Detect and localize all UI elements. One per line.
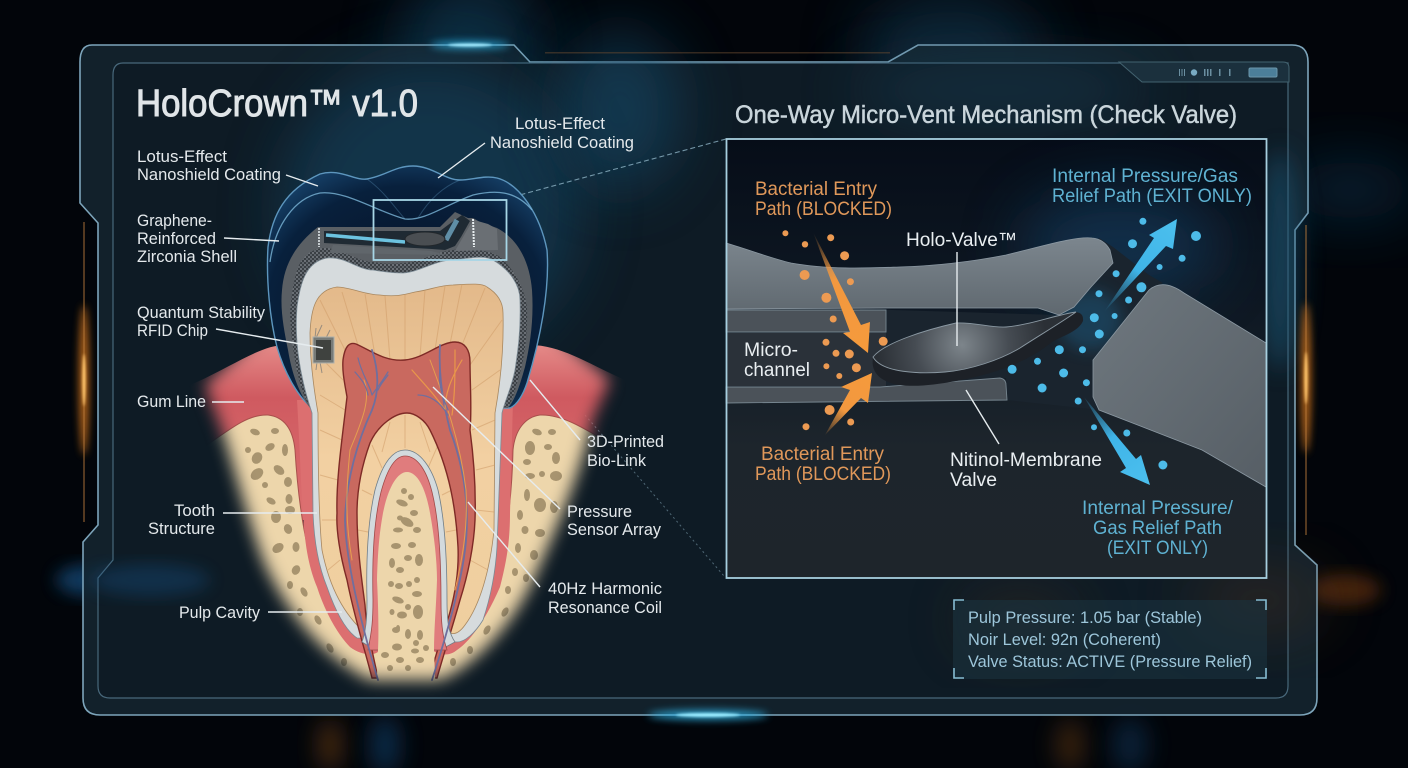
label: bio-link: 3D-Printed bbox=[587, 432, 664, 451]
blue particles bbox=[1008, 218, 1201, 470]
label: nitinol membrane bbox=[950, 390, 1102, 491]
dentin bbox=[310, 284, 503, 634]
label: zirconia shell: Reinforced bbox=[137, 229, 216, 248]
tooth enamel bbox=[296, 257, 520, 642]
label: Lotus coating left: Lotus-Effect bbox=[137, 147, 227, 166]
label: gum line bbox=[137, 392, 244, 411]
frame glow accents bbox=[79, 41, 1311, 720]
central bone spots bbox=[381, 488, 429, 671]
label: bacterial entry lower: Path (BLOCKED) bbox=[755, 464, 891, 485]
upper channel wall bbox=[726, 310, 886, 332]
right heading: One-Way Micro-Vent Mechanism (Check Valve) bbox=[735, 101, 1237, 129]
label: Lotus coating left: Nanoshield Coating bbox=[137, 165, 281, 184]
label: bacterial entry upper: Bacterial Entry bbox=[755, 179, 877, 200]
micro-channel inset bbox=[319, 215, 498, 255]
zirconia shell bbox=[281, 212, 533, 408]
dashed connector top bbox=[505, 139, 726, 199]
pulp chamber bbox=[337, 342, 475, 678]
label: tooth structure: Tooth bbox=[174, 501, 215, 520]
label: Lotus coating top bbox=[438, 114, 634, 178]
label: micro-channel: Micro- bbox=[744, 340, 798, 361]
label: holo-valve bbox=[906, 230, 1017, 346]
title: HoloCrown™ v1.0 bbox=[136, 83, 418, 125]
gum bbox=[170, 345, 640, 520]
label: bio-link: Bio-Link bbox=[587, 451, 646, 470]
label: holo-valve: Holo-Valve™ bbox=[906, 230, 1017, 251]
label: Lotus coating top: Nanoshield Coating bbox=[490, 133, 634, 152]
lower channel wall bbox=[726, 378, 1007, 403]
label: resonance coil: Resonance Coil bbox=[548, 598, 662, 617]
label: bio-link bbox=[530, 380, 664, 470]
label: nitinol membrane: Valve bbox=[950, 470, 997, 491]
tooth diagram bbox=[195, 165, 620, 693]
holo-valve bbox=[873, 312, 1083, 386]
label: Lotus coating left bbox=[137, 147, 318, 186]
label: relief path upper: Relief Path (EXIT ONLY) bbox=[1052, 186, 1252, 207]
label: RFID chip: RFID Chip bbox=[137, 321, 208, 340]
readout panel: Valve Status: ACTIVE (Pressure Relief) bbox=[968, 653, 1252, 671]
label: bacterial entry upper bbox=[755, 179, 892, 220]
readout panel bbox=[953, 600, 1267, 679]
blue arrows bbox=[1084, 219, 1177, 485]
central bone bbox=[377, 472, 437, 679]
dashed connector bottom bbox=[585, 415, 724, 576]
label: tooth structure: Structure bbox=[148, 519, 215, 538]
micro-channel bbox=[726, 333, 886, 386]
label: zirconia shell: Graphene- bbox=[137, 211, 212, 230]
readout panel: Noir Level: 92n (Coherent) bbox=[968, 631, 1161, 649]
label: pressure sensor bbox=[433, 387, 661, 539]
canal vessels bbox=[345, 345, 467, 680]
label: relief path lower: (EXIT ONLY) bbox=[1107, 538, 1208, 559]
outer frame bbox=[80, 30, 1330, 715]
label: relief path lower: Gas Relief Path bbox=[1093, 518, 1222, 539]
label: bacterial entry lower bbox=[755, 444, 891, 485]
label: RFID chip: Quantum Stability bbox=[137, 303, 265, 322]
label: tooth structure bbox=[148, 501, 317, 538]
orange particles bbox=[782, 230, 888, 430]
label: resonance coil bbox=[468, 502, 662, 617]
label: gum line: Gum Line bbox=[137, 392, 206, 411]
RFID chip bbox=[313, 325, 334, 373]
upper body bbox=[726, 238, 1113, 315]
label: zirconia shell bbox=[137, 211, 279, 266]
bio-link dotted layer bbox=[290, 248, 527, 407]
label: micro-channel bbox=[744, 340, 810, 381]
panel: check valve mechanism bbox=[726, 139, 1266, 578]
label: relief path upper bbox=[1052, 166, 1252, 207]
vent channel bbox=[860, 238, 1163, 410]
tooth body with fade bbox=[195, 165, 620, 693]
label: relief path upper: Internal Pressure/Gas bbox=[1052, 166, 1238, 187]
inner arch ligament bbox=[368, 456, 447, 650]
status widget bbox=[1119, 62, 1289, 82]
label: resonance coil: 40Hz Harmonic bbox=[548, 579, 662, 598]
zoom box bbox=[374, 200, 506, 260]
label: bacterial entry upper: Path (BLOCKED) bbox=[755, 199, 892, 220]
bone lobes bbox=[214, 414, 598, 693]
label: relief path lower: Internal Pressure/ bbox=[1082, 498, 1234, 519]
crown glass coating bbox=[267, 166, 548, 408]
label: bacterial entry lower: Bacterial Entry bbox=[761, 444, 884, 465]
label: pressure sensor: Sensor Array bbox=[567, 520, 661, 539]
panel border bbox=[726, 139, 1266, 578]
inner arch enamel bbox=[362, 450, 455, 650]
label: pressure sensor: Pressure bbox=[567, 502, 632, 521]
label: zirconia shell: Zirconia Shell bbox=[137, 247, 237, 266]
bone spots bbox=[245, 427, 562, 666]
dentin striations bbox=[313, 284, 502, 570]
orange arrows bbox=[813, 232, 872, 435]
right body bbox=[1093, 285, 1266, 487]
upper coating highlight bbox=[367, 179, 460, 219]
label: nitinol membrane: Nitinol-Membrane bbox=[950, 450, 1102, 471]
readout panel: Pulp Pressure: 1.05 bar (Stable) bbox=[968, 609, 1202, 627]
coating wave highlight bbox=[270, 192, 532, 262]
label: micro-channel: channel bbox=[744, 360, 810, 381]
label: relief path lower bbox=[1082, 498, 1234, 559]
label: RFID chip bbox=[137, 303, 323, 348]
label: Lotus coating top: Lotus-Effect bbox=[515, 114, 605, 133]
root ligament bbox=[297, 400, 513, 654]
label: pulp cavity: Pulp Cavity bbox=[179, 603, 260, 622]
